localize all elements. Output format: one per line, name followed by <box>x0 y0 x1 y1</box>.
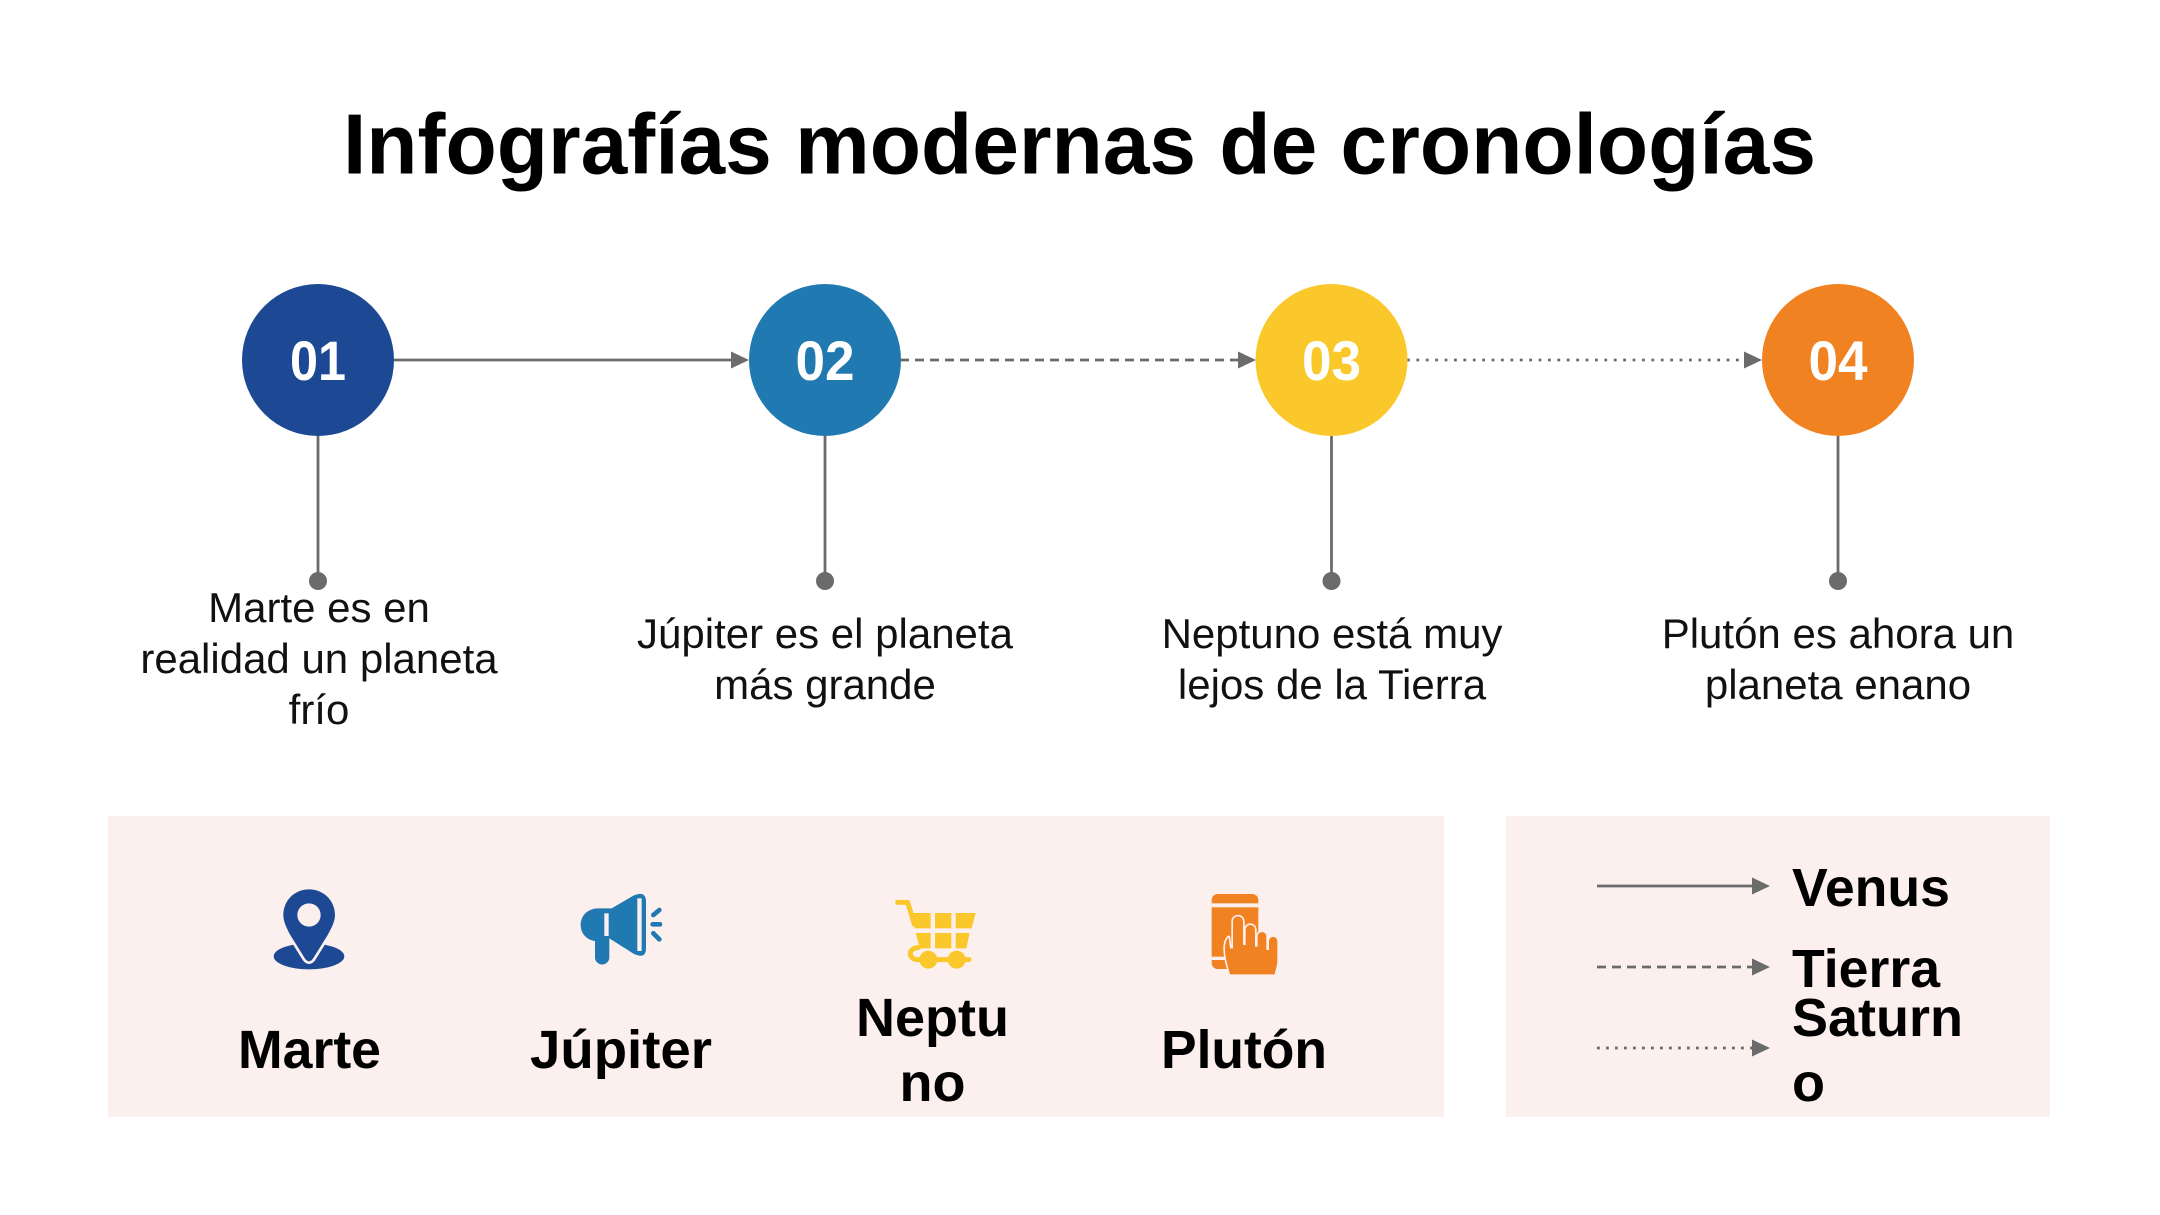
legend label: Tierra: Tierra <box>1792 939 1941 999</box>
step 03 <box>1256 284 1408 590</box>
legend label: Saturno: o <box>1792 1053 1825 1113</box>
step 04: 04 <box>1808 329 1868 392</box>
arrow: dashed 02 to 03 <box>900 352 1256 368</box>
legend: dotted arrow <box>1597 1040 1770 1056</box>
icon: megaphone <box>581 894 660 964</box>
description: Júpiter: Júpiter es el planeta <box>637 610 1014 657</box>
panel: legend <box>1506 816 2050 1117</box>
legend label: Saturno: Saturn <box>1792 988 1963 1048</box>
step 01 <box>242 284 394 590</box>
label: Plutón: Plutón <box>1161 1020 1327 1080</box>
label: Júpiter: Júpiter <box>530 1020 712 1080</box>
description: Neptuno: Neptuno está muy <box>1162 610 1502 657</box>
description: Júpiter: más grande <box>714 661 936 708</box>
icon: location pin <box>274 889 344 969</box>
description: Plutón: planeta enano <box>1705 661 1971 708</box>
step 02 <box>749 284 901 590</box>
label: Neptuno: no <box>900 1053 965 1113</box>
step 02: 02 <box>796 329 854 392</box>
description: Marte: Marte es en <box>208 584 430 631</box>
label: Marte: Marte <box>238 1020 381 1080</box>
panel: planets <box>108 816 1444 1117</box>
icon: hand tapping phone <box>1212 894 1277 974</box>
description: Marte: frío <box>289 686 349 733</box>
legend: dashed arrow <box>1597 958 1770 976</box>
step 03: 03 <box>1302 329 1361 392</box>
label: Neptuno: Neptu <box>856 988 1009 1048</box>
icon: shopping cart <box>898 902 976 969</box>
legend label: Venus: Venus <box>1792 858 1950 918</box>
legend: solid arrow <box>1597 878 1770 894</box>
title: Infografías modernas de cronologías <box>343 98 1816 192</box>
step 04 <box>1762 284 1914 590</box>
arrow: dotted 03 to 04 <box>1407 352 1762 368</box>
description: Plutón: Plutón es ahora un <box>1662 610 2014 657</box>
step 01: 01 <box>290 329 346 392</box>
description: Neptuno: lejos de la Tierra <box>1178 661 1487 708</box>
description: Marte: realidad un planeta <box>140 635 498 682</box>
arrow: solid 01 to 02 <box>394 352 749 368</box>
